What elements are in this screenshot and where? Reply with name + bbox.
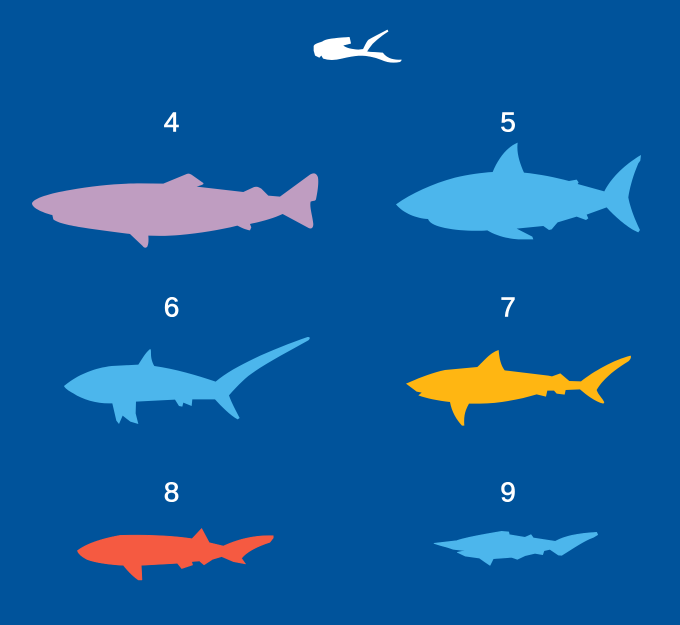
shark 6 silhouette (64, 337, 310, 424)
shark 5 silhouette (396, 143, 641, 239)
shark 8 silhouette (77, 528, 273, 580)
number 9: 9 (500, 476, 516, 508)
number 7: 7 (500, 292, 516, 322)
number 8: 8 (164, 476, 179, 508)
shark 7 silhouette (406, 350, 631, 426)
shark 4 silhouette (32, 173, 318, 248)
shark 9 silhouette (434, 531, 598, 565)
number 6: 6 (164, 292, 179, 322)
icon: diver silhouette (314, 30, 401, 62)
number 5: 5 (500, 106, 516, 138)
number 4: 4 (164, 106, 179, 138)
